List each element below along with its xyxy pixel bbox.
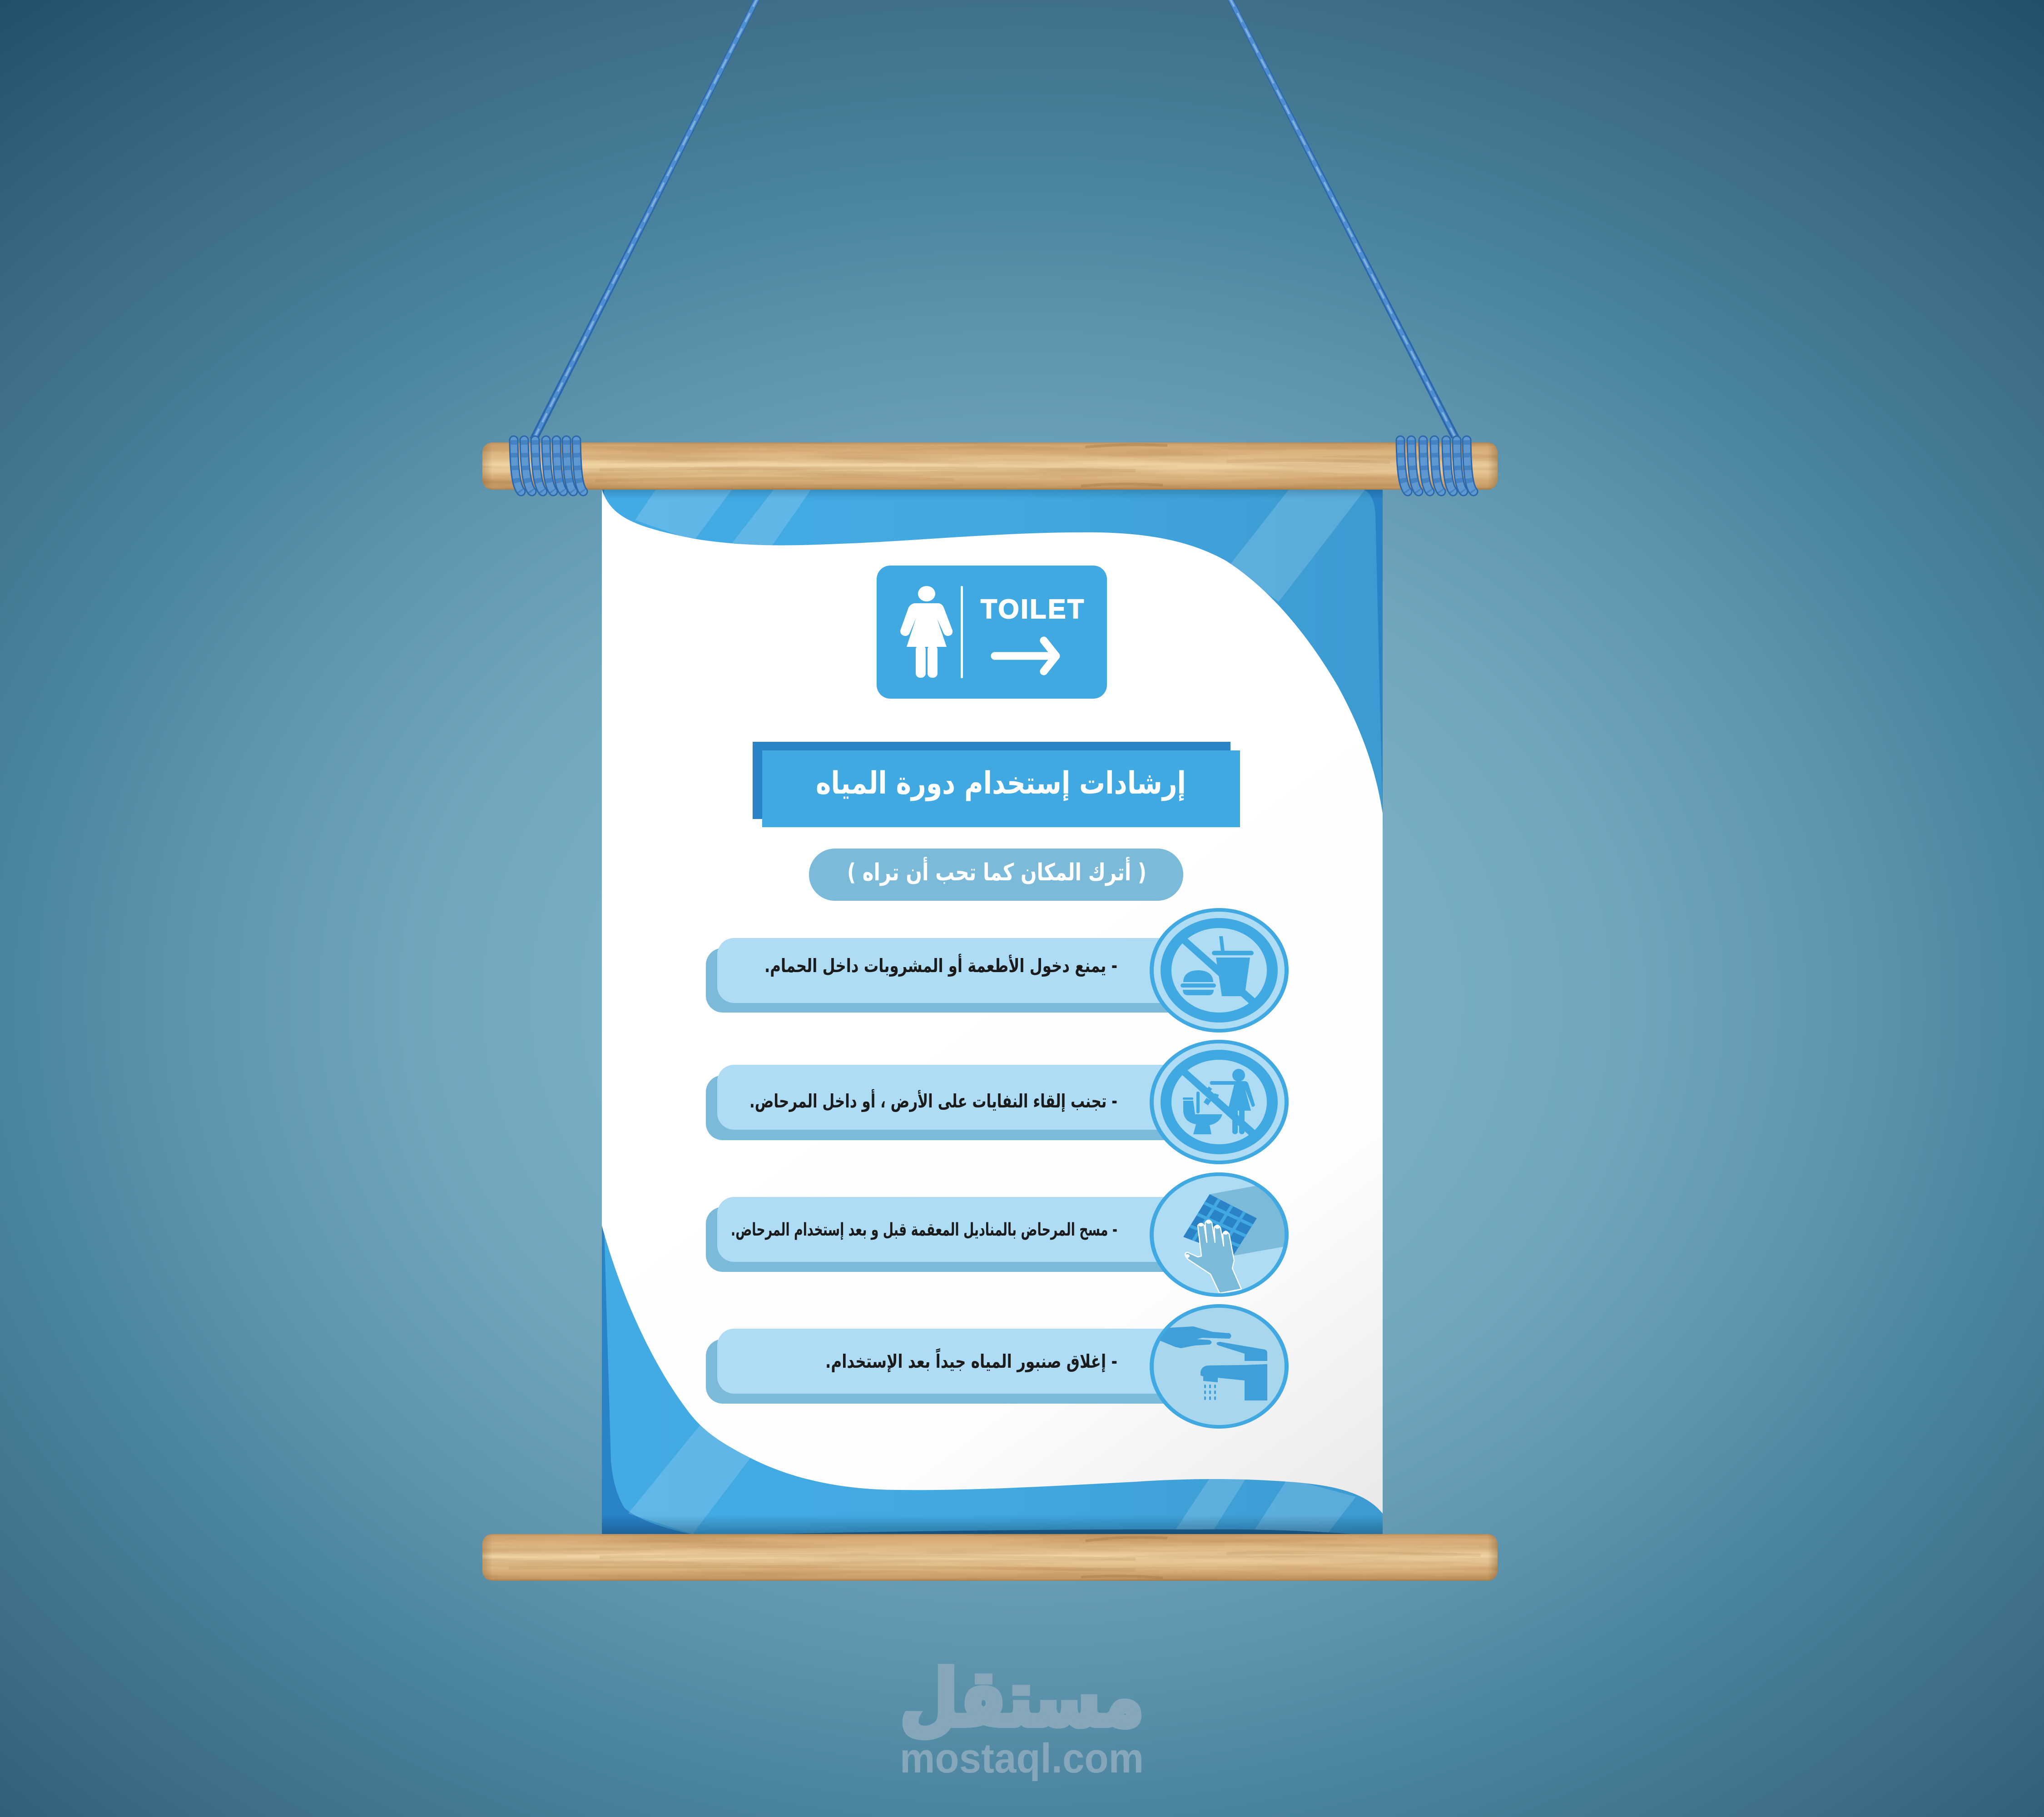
shadow under top rod [602,489,1383,499]
icon: hand closing tap [1145,1304,1289,1429]
subtitle pill [809,849,1183,901]
subtitle pill: ( أترك المكان كما تحب أن تراه ) [847,857,1146,886]
watermark: مستقل [900,1654,1144,1744]
toilet sign [877,566,1107,699]
poster [602,489,1383,1534]
poster dark edge [602,489,1383,1534]
title banner: إرشادات إستخدام دورة المياه [816,765,1186,801]
right rope coil [1400,440,1473,491]
dark band above bottom rod [772,1529,1351,1534]
light diagonal stripes [628,489,1365,1534]
row 2: no littering: - تجنب إلقاء النفايات على الأرض ، أو داخل المرحاض. [749,1089,1117,1112]
icon: woman [900,586,953,678]
icon: hand wiping [1150,1172,1290,1297]
arrow [995,640,1056,671]
watermark: mostaql.com [900,1735,1144,1782]
row 3: wipe with sanitising tissues: - مسح المرحاض بالمناديل المعقمة قبل و بعد إستخدام المرحاض. [731,1220,1117,1240]
bottom wooden rod [482,1534,1498,1581]
icon: no littering [1150,1040,1289,1164]
white wave [602,489,1383,1514]
row 4: close the tap: - إغلاق صنبور المياه جيداً بعد الإستخدام. [825,1348,1117,1373]
poster blue field [602,489,1383,1534]
title banner [753,742,1240,827]
row 1: no food or drink: - يمنع دخول الأطعمة أو المشروبات داخل الحمام. [764,953,1117,977]
shadow above bottom rod [602,1515,1383,1534]
row 2: no littering [706,1040,1289,1164]
row 4: close the tap [706,1304,1289,1429]
hanging ropes [530,0,1460,438]
left rope coil [514,440,583,491]
sign label: TOILET [981,594,1084,624]
row 1: no food or drink [706,908,1289,1033]
top wooden rod [482,442,1498,490]
icon: no food or drink [1150,908,1289,1033]
watermark [900,1654,1144,1782]
row 3: wipe with sanitising tissues [706,1172,1290,1297]
